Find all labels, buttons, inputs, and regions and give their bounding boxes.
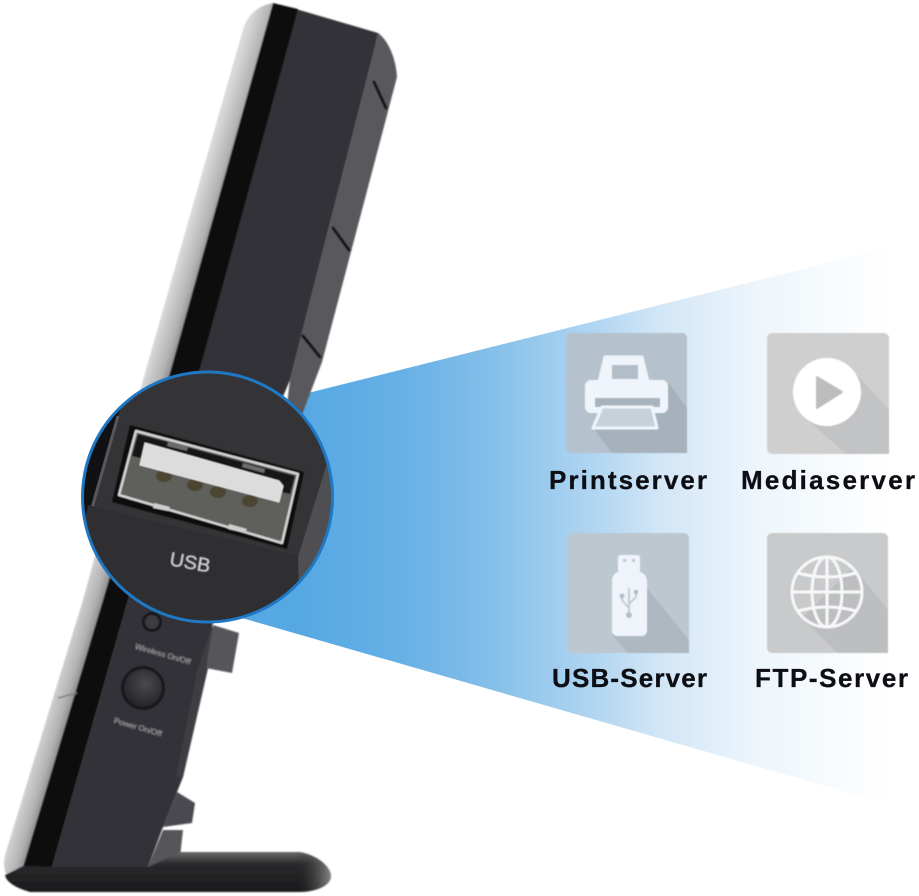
USB stick long shadow <box>612 588 689 653</box>
label: Printserver: Printserver <box>549 465 707 495</box>
tile: FTP-Server <box>767 533 888 653</box>
lower panel shading <box>86 505 298 588</box>
port black recess <box>112 425 304 549</box>
rear tab middle <box>163 792 195 827</box>
device front face <box>52 9 378 867</box>
device right side panel <box>285 33 397 420</box>
device grey left side <box>4 3 290 886</box>
label: Mediaserver: Mediaserver <box>741 465 915 495</box>
seam <box>58 693 77 698</box>
power button <box>122 668 164 708</box>
globe icon <box>792 557 862 627</box>
lighter lower edge strip <box>176 627 220 777</box>
rear tab upper <box>206 625 239 673</box>
router device body <box>4 3 397 892</box>
blue light beam <box>235 240 919 813</box>
upper latch marks <box>167 442 188 451</box>
tile: Printserver <box>566 333 687 453</box>
lower latch marks <box>153 503 170 511</box>
USB stick icon <box>612 555 647 636</box>
USB contacts <box>156 470 258 507</box>
left edge of magnified device <box>84 410 120 516</box>
power label: Power On/Off <box>113 715 164 739</box>
label: USB-Server: USB-Server <box>552 663 707 693</box>
port metal frame <box>119 431 298 543</box>
tile: Mediaserver <box>767 333 889 454</box>
play long shadow <box>803 368 889 454</box>
stand base <box>5 852 331 892</box>
rear tab lower <box>148 830 183 867</box>
play icon <box>793 358 861 426</box>
label: FTP-Server: FTP-Server <box>755 663 908 693</box>
ventilation slots <box>303 82 386 357</box>
magnifier circle: USB port <box>81 370 334 624</box>
printer long shadow <box>593 382 687 453</box>
wireless button <box>144 614 160 630</box>
tile: USB-Server <box>568 533 689 653</box>
device black edge strip <box>23 3 298 867</box>
white USB tongue <box>140 443 283 502</box>
grey wedge on right <box>298 464 331 580</box>
globe long shadow <box>802 567 888 653</box>
wireless label: Wireless On/Off <box>134 641 192 667</box>
USB label: USB <box>168 550 212 577</box>
port upper dark cavity <box>132 434 295 494</box>
printer icon <box>585 357 668 428</box>
